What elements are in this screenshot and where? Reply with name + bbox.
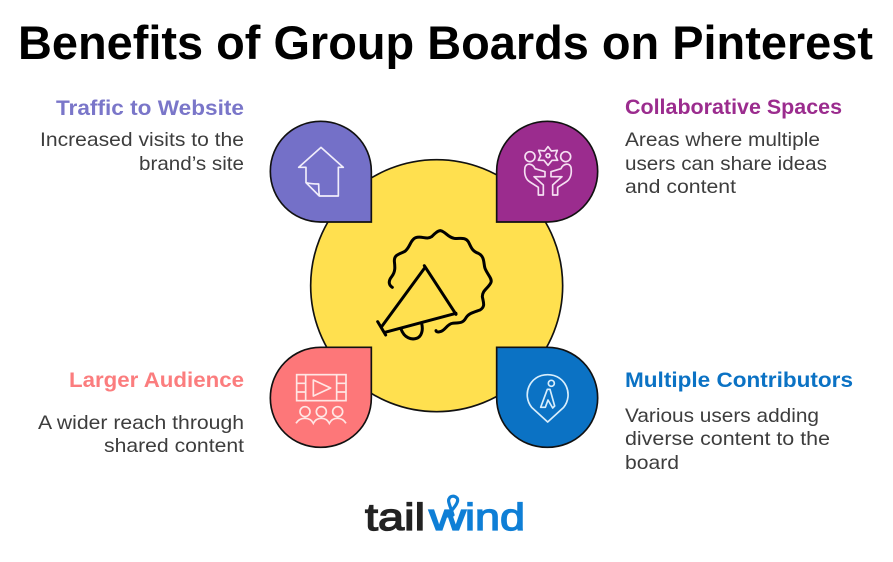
text: larger audience: shared content [104, 435, 245, 457]
icon: megaphone with burst [378, 231, 491, 339]
text: traffic to website [40, 97, 244, 175]
text: multiple contributors: Multiple Contributors [625, 369, 853, 392]
text: multiple contributors: Various users adding [625, 405, 819, 427]
text: multiple contributors: diverse content to the [625, 428, 830, 450]
panel: multiple contributors [497, 347, 598, 447]
text: multiple contributors: board [625, 452, 679, 474]
panel: traffic to website [270, 121, 371, 222]
tailwind logo: tail [365, 497, 425, 539]
yellow circle [311, 160, 563, 412]
tailwind logo: ind [465, 497, 525, 539]
panel: collaborative spaces [497, 121, 598, 222]
text: collaborative spaces: Areas where multiple [625, 129, 820, 151]
text: larger audience: Larger Audience [69, 369, 244, 392]
text: traffic to website: Traffic to Website [56, 97, 244, 120]
central diagram [270, 121, 598, 447]
text: collaborative spaces: and content [625, 176, 737, 198]
icon: house page [299, 147, 343, 196]
icon: film and audience [296, 375, 346, 423]
text: multiple contributors [625, 369, 853, 474]
title: Benefits of Group Boards on Pinterest [18, 16, 873, 69]
text: collaborative spaces: users can share ideas [625, 153, 827, 175]
tailwind logo: w [428, 497, 467, 539]
icon: two people sharing ideas [525, 147, 571, 195]
text: traffic to website: Increased visits to the [40, 129, 244, 151]
icon: location pin with person [527, 375, 568, 422]
tailwind logo [365, 496, 525, 539]
text: larger audience: A wider reach through [38, 412, 244, 434]
text: collaborative spaces [625, 96, 842, 198]
text: collaborative spaces: Collaborative Spaces [625, 96, 842, 119]
panel: larger audience [270, 347, 371, 447]
text: traffic to website: brand’s site [139, 153, 244, 175]
text: larger audience [38, 369, 245, 457]
